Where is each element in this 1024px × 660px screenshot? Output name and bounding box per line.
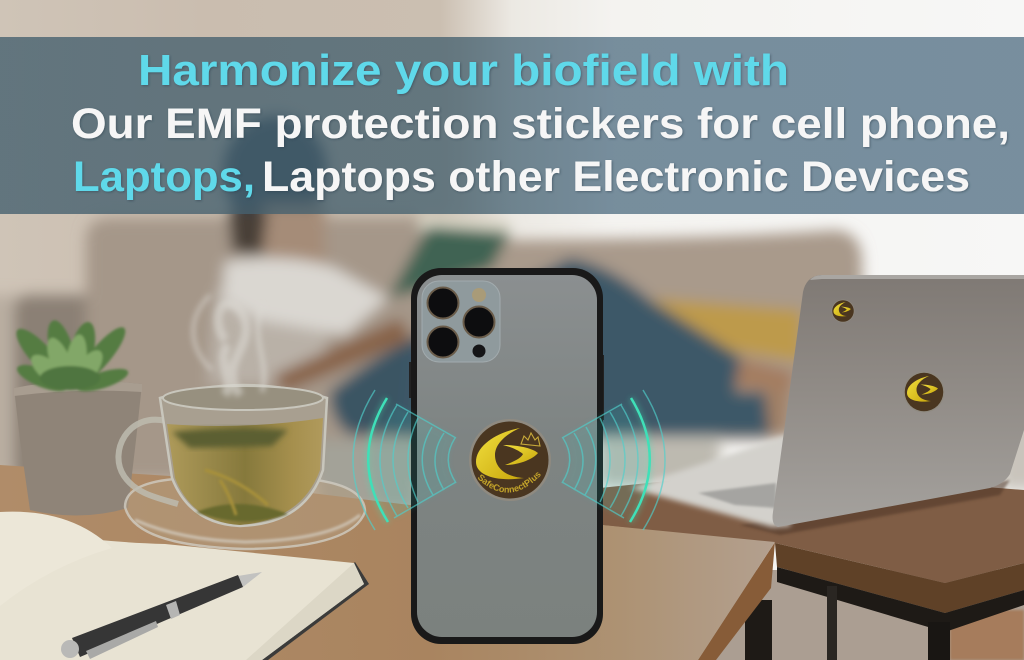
black frame bbox=[777, 567, 1024, 632]
book bbox=[388, 226, 510, 298]
bright arc glow bbox=[368, 398, 388, 522]
camera module bbox=[422, 281, 500, 362]
back leg bbox=[827, 586, 837, 660]
foreground table bbox=[0, 465, 775, 660]
right side table bbox=[600, 470, 1024, 660]
hair bbox=[228, 210, 268, 255]
jeans bbox=[330, 340, 440, 435]
sunken tea leaves bbox=[196, 504, 288, 522]
feet bbox=[735, 358, 795, 392]
outer leaves bbox=[10, 317, 132, 396]
lens 2 bbox=[464, 306, 494, 338]
pale sofa seat bbox=[318, 440, 418, 510]
heading line 2: Our EMF protection stickers for cell phone, bbox=[71, 100, 1010, 148]
pale seat right bbox=[600, 436, 720, 486]
teal glow sector bbox=[373, 404, 456, 518]
banner text bbox=[71, 46, 1010, 201]
sticker brand text: SafeConnectPlus bbox=[478, 472, 540, 493]
left page bbox=[0, 512, 112, 606]
signal waves right bbox=[562, 390, 665, 530]
arm bbox=[272, 318, 412, 392]
open notebook bbox=[0, 512, 369, 660]
phone back bbox=[417, 275, 597, 637]
pot rim bbox=[14, 381, 142, 396]
leaf centre bbox=[40, 366, 100, 390]
shirt lower bbox=[208, 290, 340, 385]
large laptop sticker bbox=[904, 372, 944, 412]
laptop lid bbox=[773, 275, 1024, 527]
flash bbox=[472, 288, 486, 302]
potted plant bbox=[10, 317, 142, 516]
lid top highlight bbox=[810, 275, 1024, 280]
cup glass bbox=[160, 385, 327, 526]
crown bbox=[521, 433, 540, 446]
banner bbox=[0, 37, 1024, 214]
keyboard keys bbox=[698, 483, 776, 508]
cup handle bbox=[118, 420, 178, 504]
succulent bbox=[10, 317, 132, 396]
bright arc bbox=[368, 398, 388, 522]
head and hair bbox=[223, 116, 327, 228]
heading line 3: Laptops other Electronic Devices bbox=[262, 153, 970, 201]
floor behind table bbox=[690, 570, 1024, 660]
pen tip bbox=[238, 572, 262, 587]
yellow cushion bbox=[650, 298, 802, 362]
sensor bbox=[472, 344, 486, 358]
tea stems bbox=[205, 470, 268, 515]
right sofa cushion bbox=[460, 230, 862, 440]
front leg bbox=[928, 622, 950, 660]
foreground table side bbox=[698, 542, 775, 660]
sofa back bbox=[86, 218, 460, 480]
lens 1 bbox=[428, 288, 458, 318]
faint arcs bbox=[562, 390, 665, 530]
pen body bbox=[72, 575, 243, 657]
warm floor corner bbox=[950, 610, 1024, 660]
table top bbox=[600, 470, 1024, 583]
phone frame bbox=[411, 268, 603, 644]
near leg bbox=[745, 600, 772, 660]
left sofa arm bbox=[14, 295, 104, 485]
pen clip bbox=[86, 621, 158, 659]
bright arc bbox=[630, 398, 650, 522]
saucer highlight bbox=[135, 515, 360, 542]
laptop shadow bbox=[740, 480, 1010, 535]
heading line 3 accent: Laptops, bbox=[73, 153, 255, 201]
book pages bbox=[420, 215, 512, 238]
tea bbox=[167, 418, 323, 525]
phone bbox=[409, 268, 604, 644]
lens 3 bbox=[428, 326, 458, 358]
lower foot bbox=[765, 388, 790, 436]
pale patch right of laptop bbox=[1000, 420, 1024, 490]
phone sticker logo bbox=[469, 419, 551, 501]
floating tea leaves bbox=[172, 428, 288, 448]
bright arc glow bbox=[630, 398, 650, 522]
table front face bbox=[775, 543, 1024, 613]
cup rim interior bbox=[163, 386, 323, 410]
jeans behind phone and right bbox=[400, 258, 770, 436]
heading line 1: Harmonize your biofield with bbox=[138, 46, 789, 95]
signal waves left bbox=[353, 390, 456, 530]
small laptop sticker bbox=[832, 300, 854, 322]
shirt upper bbox=[222, 258, 388, 335]
page edge bbox=[246, 563, 364, 660]
pot bbox=[14, 381, 142, 516]
notebook cover edge bbox=[258, 562, 369, 660]
faint arcs bbox=[353, 390, 456, 530]
lower left wall bbox=[0, 295, 20, 475]
teal glow sector bbox=[562, 404, 645, 518]
inner leaves bbox=[26, 333, 108, 395]
right page bbox=[0, 540, 364, 660]
curve for brand text bbox=[477, 472, 544, 493]
laptop bbox=[630, 275, 1024, 535]
keyboard base bbox=[630, 434, 790, 527]
neck bbox=[262, 205, 325, 275]
sticker disc bbox=[469, 419, 551, 501]
steam bbox=[193, 295, 264, 395]
blurred sofa and reader bbox=[0, 116, 1024, 510]
banner background bbox=[0, 37, 1024, 214]
pen cap end bbox=[61, 640, 79, 658]
pen ring bbox=[166, 601, 180, 619]
tea cup and saucer bbox=[118, 295, 365, 549]
saucer bbox=[125, 478, 365, 549]
pen bbox=[61, 572, 262, 659]
side buttons bbox=[409, 362, 413, 398]
